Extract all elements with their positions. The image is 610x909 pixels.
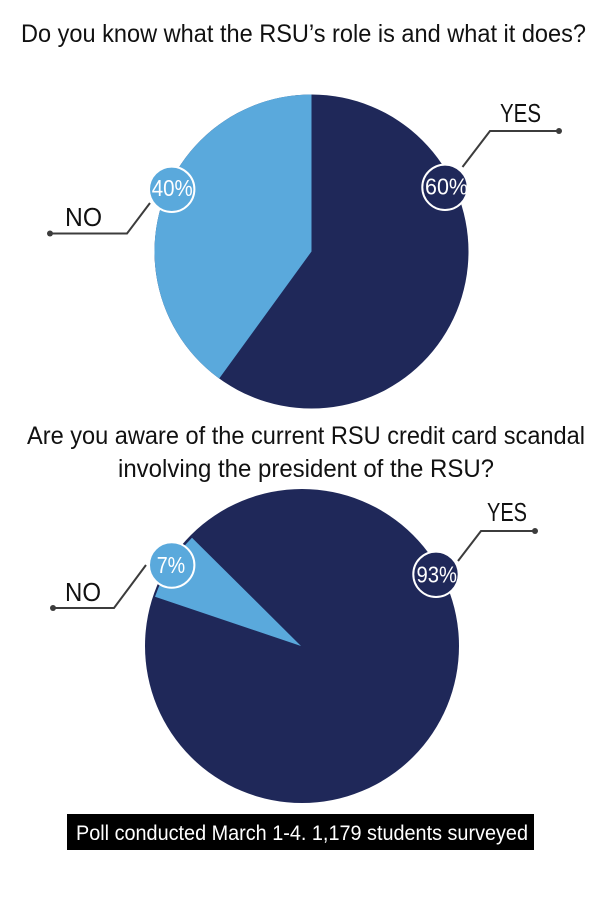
- heading: question 2: involving the president of the RSU?: [118, 455, 494, 483]
- callout: NO 7%: [50, 542, 194, 611]
- heading: question 2: Are you aware of the current RSU credit card scandal: [27, 422, 585, 450]
- footer note: [67, 814, 534, 850]
- callout: YES 93%: YES: [487, 499, 527, 527]
- heading: question 2: [27, 422, 585, 483]
- callout: NO 7%: NO: [65, 579, 101, 607]
- chart: pie question 2: [145, 489, 459, 803]
- callout: YES 60%: 60%: [425, 174, 468, 200]
- callout: YES 60%: YES: [500, 100, 541, 128]
- footer note: Poll conducted March 1-4. 1,179 students surveyed: [76, 822, 528, 845]
- callout: NO 40%: [47, 167, 194, 236]
- callout: NO 7%: 7%: [157, 552, 185, 578]
- chart: pie question 1: [154, 94, 468, 408]
- callout: YES 60%: [422, 100, 562, 210]
- callout: YES 93%: [413, 499, 538, 597]
- heading: question 1: Do you know what the RSU’s role is and what it does?: [21, 20, 586, 48]
- callout: NO 40%: 40%: [152, 175, 193, 201]
- callout: YES 93%: 93%: [416, 562, 457, 588]
- callout: NO 40%: NO: [65, 204, 102, 232]
